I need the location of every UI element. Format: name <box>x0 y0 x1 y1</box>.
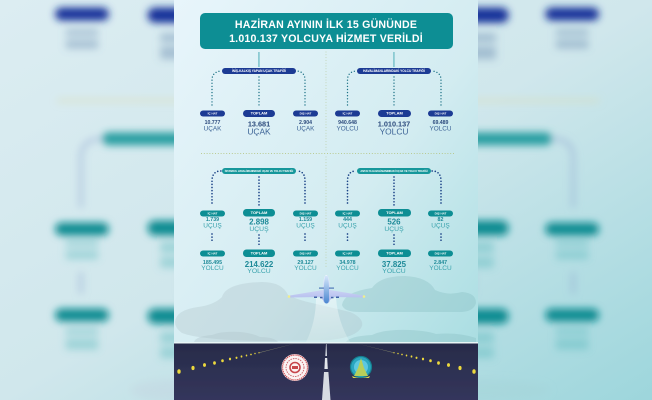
panel: inis kalkis ucak trafigi: TOPLAM <box>251 111 268 116</box>
panel: antalya havalimani: YOLCU <box>429 265 452 272</box>
panel: antalya havalimani: UÇUŞ <box>431 223 450 230</box>
panel: antalya havalimani: 37.825 <box>382 260 407 269</box>
panel: antalya havalimani: ANTALYA HAVALİMANINDAKİ UÇAK VE YOLCU TRAFİĞİ <box>360 170 428 173</box>
panel: istanbul havalimani: 29.127 <box>297 260 314 266</box>
panel: antalya havalimani: DIŞ HAT <box>435 212 447 216</box>
panel: istanbul havalimani: UÇUŞ <box>296 223 315 230</box>
panel: istanbul havalimani <box>200 168 318 275</box>
panel: istanbul havalimani: YOLCU <box>294 265 317 272</box>
panel: istanbul havalimani: 214.622 <box>245 260 274 269</box>
panel: antalya havalimani: 444 <box>343 217 352 223</box>
panel: havalimanlarindaki yolcu trafigi: 1.010.137 <box>378 120 410 129</box>
panel: inis kalkis ucak trafigi: UÇAK <box>247 127 271 137</box>
panel: istanbul havalimani: YOLCU <box>247 268 271 275</box>
title banner <box>200 13 453 49</box>
title banner: HAZİRAN AYININ İLK 15 GÜNÜNDE <box>235 18 417 31</box>
panel: istanbul havalimani: 1.159 <box>299 217 312 223</box>
panel: inis kalkis ucak trafigi <box>200 52 318 137</box>
panel: istanbul havalimani: 185.495 <box>203 260 222 266</box>
panel: inis kalkis ucak trafigi: İÇ HAT <box>208 111 218 116</box>
panel: havalimanlarindaki yolcu trafigi: HAVALİMANLARINDAKİ YOLCU TRAFİĞİ <box>363 68 425 73</box>
panel: antalya havalimani: UÇUŞ <box>384 226 404 233</box>
divider lines <box>202 52 454 268</box>
panel: havalimanlarindaki yolcu trafigi: 940.648 <box>338 120 357 126</box>
panel: istanbul havalimani: 1.739 <box>206 217 219 223</box>
panel: istanbul havalimani: UÇUŞ <box>249 226 269 233</box>
panel: istanbul havalimani: UÇUŞ <box>203 223 222 230</box>
panel: inis kalkis ucak trafigi: 2.904 <box>299 120 312 126</box>
panel: istanbul havalimani: TOPLAM <box>251 251 268 256</box>
panel: istanbul havalimani: İÇ HAT <box>208 211 218 216</box>
panel: antalya havalimani: İÇ HAT <box>343 211 353 216</box>
panel: antalya havalimani: 82 <box>438 217 443 223</box>
panel: inis kalkis ucak trafigi: İNİŞ-KALKIŞ YAPAN UÇAK TRAFİĞİ <box>232 68 286 73</box>
panel: havalimanlarindaki yolcu trafigi: YOLCU <box>429 126 452 133</box>
panel: istanbul havalimani: YOLCU <box>201 265 224 272</box>
runway <box>174 342 478 400</box>
panel: havalimanlarindaki yolcu trafigi: DIŞ HAT <box>435 112 447 116</box>
panel: antalya havalimani: YOLCU <box>336 265 359 272</box>
panel: inis kalkis ucak trafigi: UÇAK <box>204 126 222 133</box>
clouds <box>175 276 476 342</box>
panel: istanbul havalimani: DIŞ HAT <box>300 252 312 256</box>
panel: inis kalkis ucak trafigi: UÇAK <box>297 126 315 133</box>
panel: inis kalkis ucak trafigi: 13.681 <box>248 120 270 129</box>
panel: antalya havalimani: 34.978 <box>339 260 356 266</box>
panel: havalimanlarindaki yolcu trafigi: YOLCU <box>336 126 359 133</box>
panel: antalya havalimani: DIŞ HAT <box>435 252 447 256</box>
panel: havalimanlarindaki yolcu trafigi: YOLCU <box>380 127 408 137</box>
panel: antalya havalimani <box>335 168 453 275</box>
panel: antalya havalimani: YOLCU <box>382 268 406 275</box>
panel: antalya havalimani: TOPLAM <box>386 210 404 215</box>
panel: antalya havalimani: 526 <box>387 218 401 226</box>
panel: inis kalkis ucak trafigi: 10.777 <box>205 120 221 126</box>
panel: havalimanlarindaki yolcu trafigi <box>335 52 453 137</box>
panel: havalimanlarindaki yolcu trafigi: TOPLAM <box>386 111 404 116</box>
logo: airports authority <box>350 356 372 378</box>
panel: istanbul havalimani: TOPLAM <box>251 210 268 215</box>
central poster panel <box>174 0 478 400</box>
panel: antalya havalimani: 2.847 <box>434 260 447 266</box>
logo: ministry seal <box>282 354 308 381</box>
panel: istanbul havalimani: İSTANBUL HAVALİMANINDAKİ UÇAK VE YOLCU TRAFİĞİ <box>225 170 293 173</box>
panel: inis kalkis ucak trafigi: DIŞ HAT <box>300 112 312 116</box>
airplane taking off <box>288 275 365 342</box>
panel: havalimanlarindaki yolcu trafigi: İÇ HAT <box>343 111 353 116</box>
panel: antalya havalimani: İÇ HAT <box>343 251 353 256</box>
panel: istanbul havalimani: 2.898 <box>249 218 269 226</box>
panel: antalya havalimani: TOPLAM <box>386 251 404 256</box>
title banner: 1.010.137 YOLCUYA HİZMET VERİLDİ <box>229 32 423 45</box>
panel: istanbul havalimani: İÇ HAT <box>208 251 218 256</box>
panel: istanbul havalimani: DIŞ HAT <box>300 212 312 216</box>
panel: antalya havalimani: UÇUŞ <box>338 223 357 230</box>
panel: havalimanlarindaki yolcu trafigi: 69.489 <box>433 120 449 126</box>
